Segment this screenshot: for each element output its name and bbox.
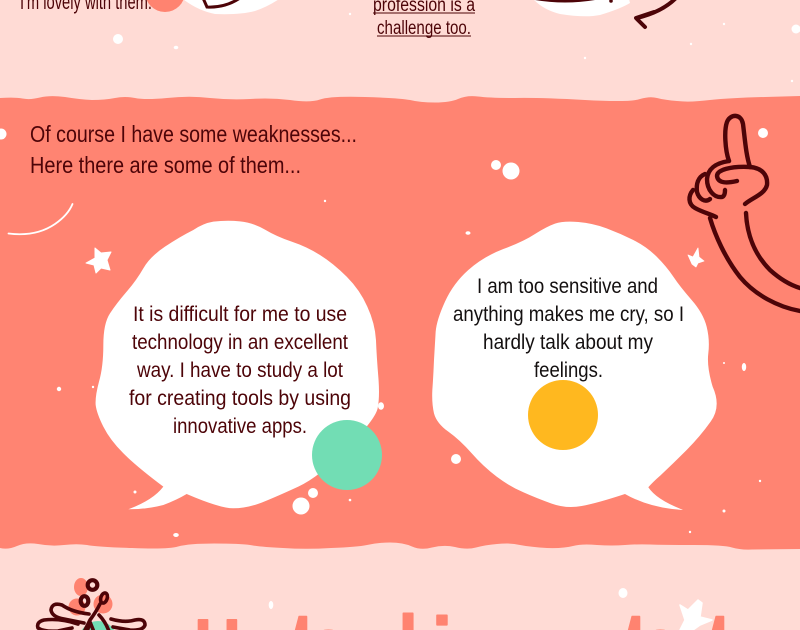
text: sensitive weakness: hardly talk about my: [483, 331, 653, 354]
speckles: band: [0, 128, 768, 537]
speech bubble: sensitive: [432, 222, 717, 510]
text: sensitive weakness: I am too sensitive and: [477, 275, 658, 298]
speckles: lower background: [269, 588, 628, 609]
icon: green circle: [312, 420, 382, 490]
text: profession is a challenge too: [373, 0, 475, 39]
flower line work: [38, 580, 145, 630]
speech bubble: technology: [96, 221, 382, 509]
text: technology weakness: It is difficult for me to use: [133, 303, 347, 326]
bubble shape: [96, 221, 379, 509]
decoration: white arc: [8, 204, 72, 234]
bubble shape: [432, 222, 717, 510]
icon: yellow circle: [528, 380, 598, 450]
heading: weaknesses intro: Of course I have some weaknesses...: [30, 121, 357, 147]
arrow: curved pointer: [636, 0, 676, 27]
icon: star right: [688, 248, 704, 267]
bubble: top left fragment: [178, 0, 285, 14]
wavy salmon background: [0, 96, 800, 550]
text: sensitive weakness: feelings.: [534, 359, 603, 382]
text: technology weakness: way. I have to study a lot: [136, 359, 343, 382]
heading: cropped salmon title: [194, 588, 734, 630]
text: technology weakness: for creating tools by using: [129, 387, 351, 410]
text: technology weakness: technology in an excellent: [132, 331, 348, 354]
top section remnants: [20, 0, 676, 39]
text: profession is a challenge too: challenge too.: [377, 18, 471, 39]
text: technology weakness: [129, 303, 351, 438]
icon: star left: [86, 248, 111, 273]
illustration: pointing hand: [689, 116, 800, 311]
text: technology weakness: innovative apps.: [173, 415, 307, 438]
heading: weaknesses intro: [30, 121, 357, 178]
heading: weaknesses intro: Here there are some of them...: [30, 152, 301, 178]
speckles: upper background: [113, 13, 800, 82]
bubble: top right fragment: [530, 0, 630, 16]
icon: salmon circle: [145, 0, 185, 12]
panel: weaknesses band: [0, 96, 800, 550]
text: sensitive weakness: [453, 275, 684, 382]
illustration: flower: [38, 578, 145, 630]
flower colour blobs: [68, 578, 117, 630]
text: sensitive weakness: anything makes me cry, so I: [453, 303, 684, 326]
icon: lower star: [680, 600, 712, 630]
